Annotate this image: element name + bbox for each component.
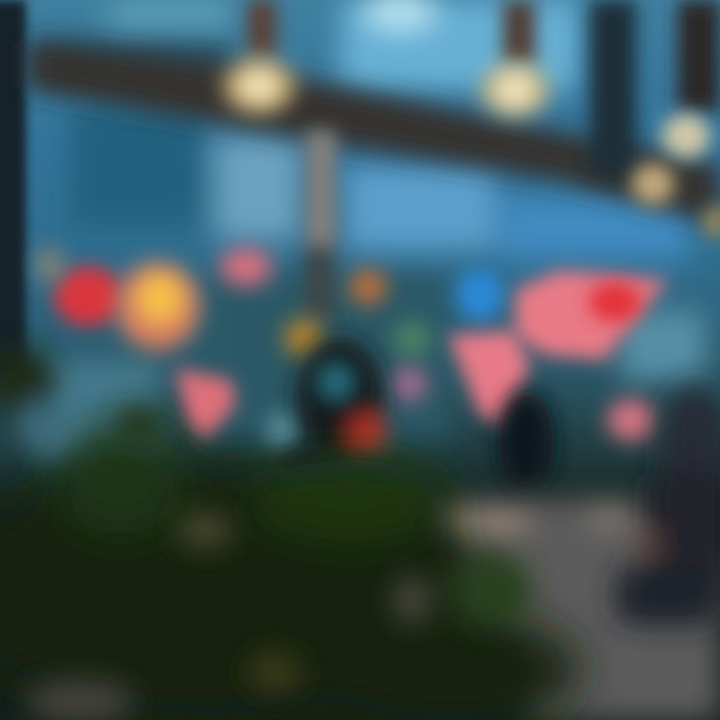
figure, centre bbox=[276, 338, 387, 478]
light 1 bbox=[223, 58, 295, 114]
pavement in lower right bbox=[430, 498, 720, 720]
hanging lights bbox=[223, 58, 720, 239]
pink blob, right bbox=[607, 399, 655, 441]
world map blobs bbox=[37, 248, 670, 453]
dark figure at right edge bbox=[615, 385, 720, 625]
pink blob, south america bbox=[176, 368, 236, 442]
horizontal beam bbox=[30, 42, 720, 225]
light 2 bbox=[481, 63, 549, 117]
red blob, left bbox=[54, 266, 122, 326]
pink blob, top bbox=[220, 248, 272, 286]
foliage in foreground bbox=[0, 347, 580, 720]
left dark column bbox=[0, 0, 26, 380]
orange dot bbox=[350, 269, 386, 305]
vertical posts bbox=[248, 0, 720, 320]
dark figure silhouettes in centre bbox=[276, 338, 555, 494]
glass panes: lighter and darker reflections bbox=[30, 0, 705, 460]
pink continent bbox=[515, 270, 670, 360]
light 4 bbox=[631, 163, 675, 205]
faded beige blob, far left bbox=[37, 248, 63, 282]
pale blue dot bbox=[267, 413, 303, 453]
light 5 bbox=[704, 205, 720, 239]
amber dot bbox=[284, 318, 324, 358]
blue dot bbox=[457, 269, 503, 321]
light 3 bbox=[662, 114, 710, 158]
figure, right of centre bbox=[497, 390, 555, 494]
mauve dot bbox=[391, 366, 427, 402]
yellow glow blob bbox=[116, 262, 200, 350]
green dot bbox=[394, 321, 430, 357]
pink africa shape bbox=[448, 330, 530, 428]
red hotspot bbox=[589, 282, 641, 322]
